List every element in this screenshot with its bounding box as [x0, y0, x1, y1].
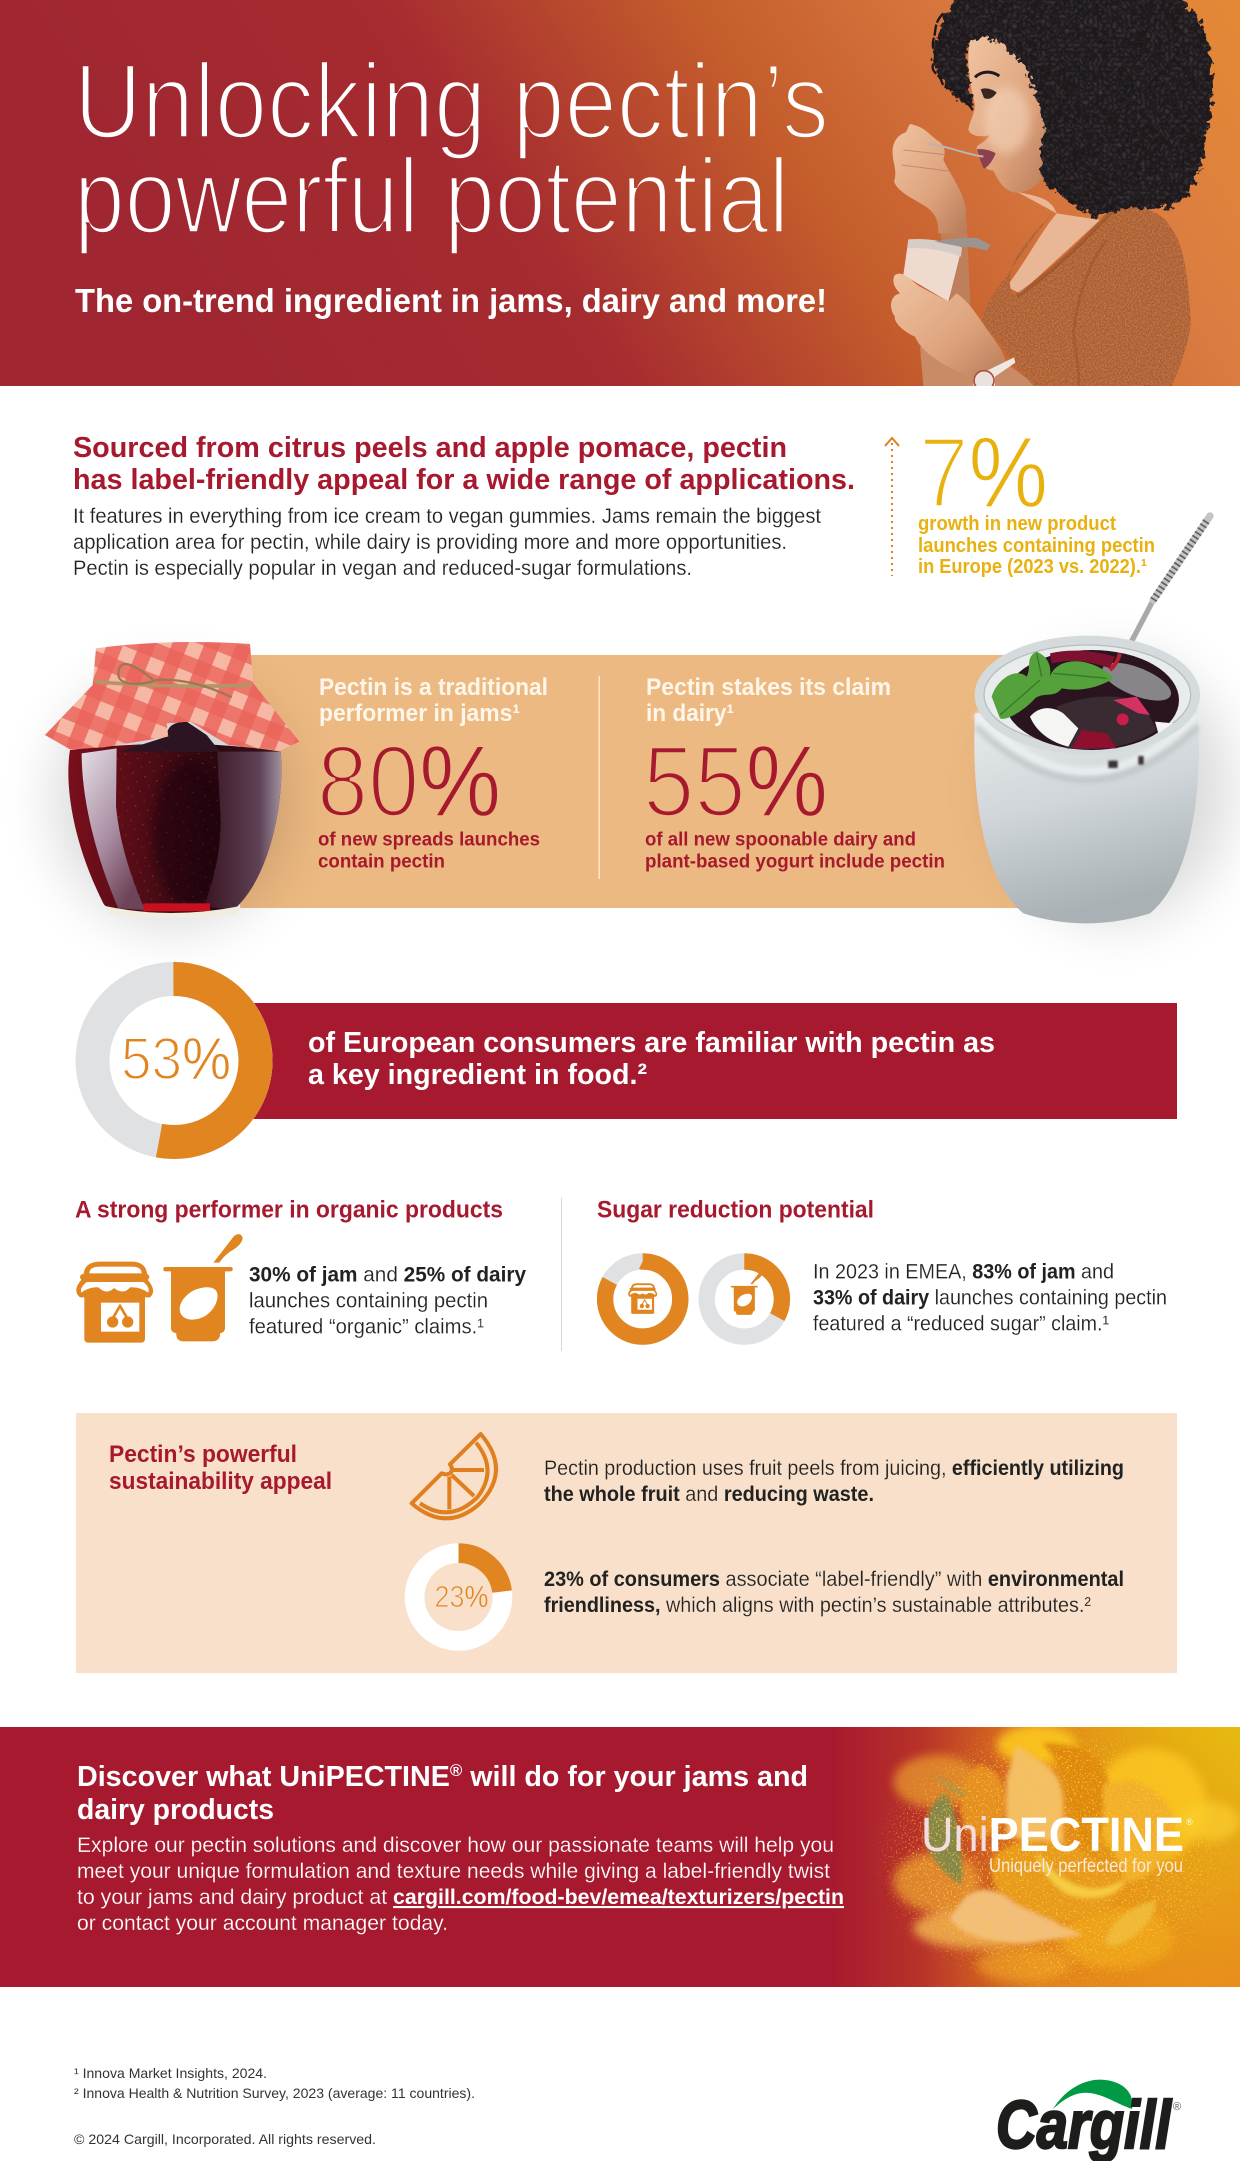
awareness text: a key ingredient in food.² [308, 1059, 647, 1091]
jam stat: Pectin is a traditional [319, 674, 548, 701]
logo: UniPECTINE: UniPECTINE [921, 1809, 1184, 1862]
heading: sustainability: sustainability appeal [109, 1468, 332, 1495]
intro paragraph: It features in everything from ice cream to vegan gummies. Jams remain the biggest [73, 505, 821, 528]
text: label-friendly: 23% of consumers associate “label-friendly” with environmental [544, 1568, 1124, 1591]
heading: discover: will do for your jams and [462, 1761, 808, 1793]
call to action band [0, 1725, 1240, 1987]
dairy stat: Pectin stakes its claim [646, 674, 891, 701]
growth caption: in Europe (2023 vs. 2022).¹ [918, 556, 1147, 578]
jam stat: contain pectin [318, 850, 445, 872]
logo: Cargill: ® [1173, 2101, 1181, 2113]
intro paragraph: application area for pectin, while dairy is providing more and more opportunities. [73, 531, 787, 554]
donut chart: 33% dairy [707, 1261, 782, 1337]
photo: citrus peel and powder burst [830, 1725, 1240, 1987]
text: label-friendly [544, 1568, 1124, 1617]
panel: organic products [75, 1196, 526, 1343]
cta paragraph [77, 1834, 844, 1935]
logo: UniPECTINE: ® [1186, 1817, 1193, 1827]
title: Unlocking pectin’s [74, 41, 829, 161]
cta paragraph: or contact your account manager today. [77, 1912, 448, 1935]
footnotes: © 2024 Cargill, Incorporated. All rights reserved. [74, 2131, 376, 2147]
footnotes [74, 2065, 475, 2147]
cta paragraph: to your jams and dairy product at cargill.com/food-bev/emea/texturizers/pectin [77, 1886, 844, 1909]
dairy stat: of all new spoonable dairy and [645, 828, 916, 850]
heading: sustainability: Pectin’s powerful [109, 1441, 297, 1468]
heading: sustainability [109, 1441, 332, 1495]
heading: discover: ® [450, 1761, 463, 1780]
growth caption: launches containing pectin [918, 535, 1155, 557]
dairy stat [643, 674, 945, 872]
footnotes: ¹ Innova Market Insights, 2024. [74, 2065, 267, 2081]
organic text: 30% of jam and 25% of dairy [249, 1264, 526, 1286]
growth callout: 7% [885, 417, 1155, 578]
sugar text: In 2023 in EMEA, 83% of jam and [813, 1260, 1114, 1284]
intro text block [73, 432, 855, 580]
donut chart: 23%: 23% [434, 1579, 488, 1614]
donut chart: 53%: 53% [121, 1026, 231, 1092]
heading: sugar reduction: Sugar reduction potential [597, 1196, 874, 1224]
intro heading: Sourced from citrus peels and apple pomace, pectin [73, 432, 787, 464]
donut chart: 23% [415, 1553, 502, 1641]
jam stat: performer in jams¹ [319, 700, 520, 727]
organic text [249, 1264, 526, 1338]
panel: jam and dairy stats [240, 655, 1030, 908]
awareness band: 53% [76, 962, 1177, 1159]
arrow: dotted upward [885, 438, 899, 576]
text: whole fruit: Pectin production uses fruit peels from juicing, efficiently utilizing [544, 1457, 1124, 1480]
organic text: launches containing pectin [249, 1290, 488, 1312]
jam stat [317, 674, 548, 872]
text: whole fruit: the whole fruit and reducing waste. [544, 1483, 874, 1506]
growth caption [918, 513, 1155, 578]
title: powerful potential [74, 136, 789, 256]
panel: sustainability appeal [76, 1413, 1177, 1673]
dairy stat: 55% [643, 726, 828, 838]
dairy stat: plant-based yogurt include pectin [645, 850, 945, 872]
panel: sugar reduction [597, 1196, 1167, 1337]
jam stat: of new spreads launches [318, 828, 540, 850]
jam stat: 80% [317, 726, 501, 838]
cta paragraph: Explore our pectin solutions and discover how our passionate teams will help you [77, 1834, 834, 1857]
heading: discover: Discover what UniPECTINE [77, 1761, 454, 1793]
heading: organic: A strong performer in organic products [75, 1196, 503, 1224]
intro heading: has label-friendly appeal for a wide range of applications. [73, 464, 855, 496]
title [74, 41, 829, 256]
intro paragraph [73, 505, 821, 580]
footnotes: ² Innova Health & Nutrition Survey, 2023 (average: 11 countries). [74, 2085, 475, 2101]
stat: 7%: 7% [919, 417, 1048, 529]
heading: discover [77, 1761, 808, 1826]
text: whole fruit [544, 1457, 1124, 1506]
heading: discover: dairy products [77, 1794, 274, 1826]
icon: yogurt cup [163, 1234, 243, 1341]
logo: Cargill: Cargill [996, 2087, 1173, 2161]
sugar text [813, 1260, 1167, 1336]
hero banner [0, 0, 1240, 391]
sugar text: 33% of dairy launches containing pectin [813, 1286, 1167, 1310]
donut chart: 83% jam [605, 1261, 680, 1337]
dairy stat: in dairy¹ [646, 700, 734, 727]
subtitle: The on-trend ingredient in jams, dairy and more! [75, 282, 827, 319]
cta paragraph: meet your unique formulation and texture needs while giving a label-friendly twist [77, 1860, 830, 1883]
photo: yogurt jar with jam and spoon [974, 516, 1230, 923]
sugar text: featured a “reduced sugar” claim.¹ [813, 1312, 1109, 1336]
intro paragraph: Pectin is especially popular in vegan and reduced-sugar formulations. [73, 557, 692, 580]
awareness text: of European consumers are familiar with pectin as [308, 1027, 995, 1059]
icon: orange slice [412, 1434, 496, 1518]
photo: woman eating yogurt [891, 0, 1213, 391]
donut chart: 53% [76, 962, 272, 1159]
logo: UniPECTINE: Uniquely perfected for you [989, 1855, 1183, 1877]
organic text: featured “organic” claims.¹ [249, 1316, 484, 1338]
icon: jam jar [76, 1262, 153, 1343]
growth caption: growth in new product [918, 513, 1116, 535]
photo: jam jar [45, 642, 299, 925]
awareness text [308, 1027, 995, 1091]
text: label-friendly: friendliness, which aligns with pectin’s sustainable attributes.² [544, 1594, 1091, 1617]
intro heading [73, 432, 855, 496]
